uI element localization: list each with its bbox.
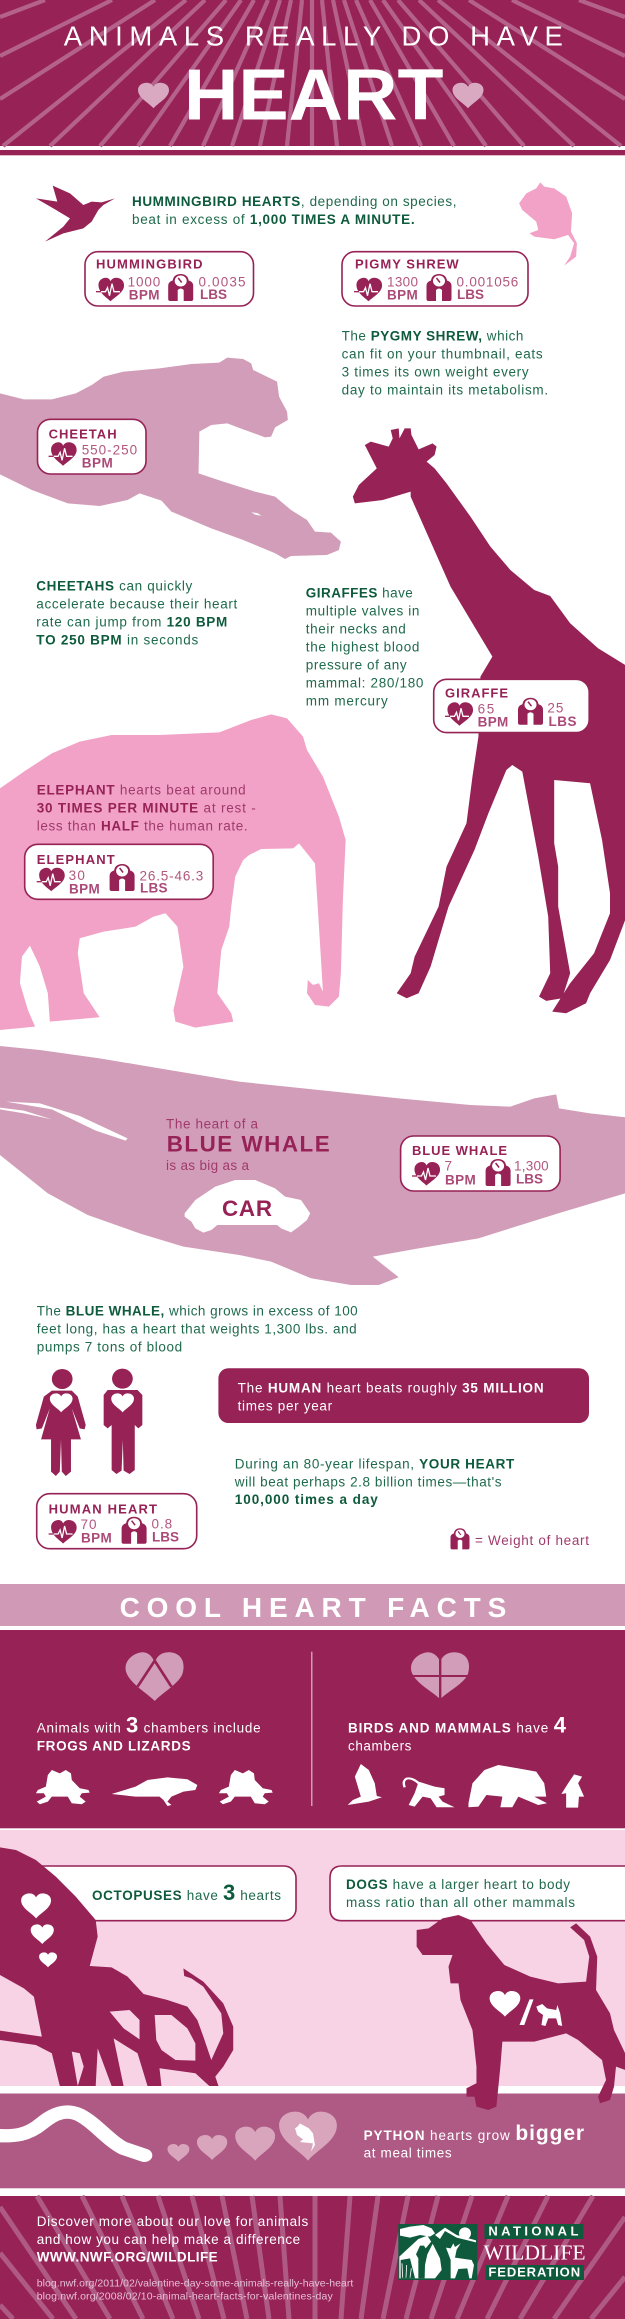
- text: blue whale paragraph: [37, 1304, 358, 1355]
- icon: left heart: [138, 83, 169, 108]
- python band: [0, 2094, 625, 2188]
- heading band: cool heart facts: [0, 1584, 625, 1626]
- stat box: human heart: [37, 1494, 197, 1549]
- text: source links: blog.nwf.org/2011/02/valentine-day-some-animals-really-have-heart: [37, 2278, 353, 2290]
- dog silhouette: [417, 1915, 625, 2110]
- icon: hummingbird silhouette: [36, 186, 115, 242]
- stat box: cheetah: BPM: [82, 456, 113, 471]
- icon: three chamber heart: [126, 1652, 184, 1701]
- text: hummingbird hearts: beat in excess of 1,000 TIMES A MINUTE.: [132, 212, 415, 227]
- stat box: pigmy shrew: [342, 252, 528, 306]
- icons: frogs and lizard: [36, 1770, 273, 1806]
- text: giraffes: their necks and: [306, 622, 406, 637]
- panel: chambers: [0, 1630, 625, 1828]
- text: hummingbird hearts: [132, 194, 456, 227]
- stat box: hummingbird: 0.0035: [198, 275, 246, 290]
- stat box: giraffe: LBS: [548, 714, 576, 729]
- text: discover more: and how you can help make a difference: [37, 2232, 300, 2247]
- stat box: giraffe: BPM: [478, 715, 508, 730]
- stat box: hummingbird: BPM: [129, 288, 160, 303]
- header banner: [0, 0, 625, 155]
- stat box: human heart: 0.8: [152, 1516, 172, 1531]
- text: pygmy shrew: can fit on your thumbnail, eats: [342, 346, 543, 361]
- stat box: giraffe: 25: [547, 701, 563, 716]
- text: pygmy shrew: day to maintain its metabolism.: [342, 382, 548, 397]
- title line: animals really do have: ANIMALS REALLY DO HAVE: [64, 21, 563, 52]
- text: lifespan: 100,000 times a day: [235, 1492, 378, 1507]
- stat box: pigmy shrew: PIGMY SHREW: [355, 257, 459, 272]
- text: lifespan: will beat perhaps 2.8 billion times—that's: [234, 1474, 502, 1489]
- legend: weight of heart: [450, 1528, 589, 1549]
- text: discover more: Discover more about our love for animals: [37, 2214, 308, 2229]
- elephant silhouette: [0, 714, 346, 1030]
- octopus silhouette: [0, 1847, 233, 2086]
- text: four chambers: BIRDS AND MAMMALS have 4: [348, 1713, 567, 1738]
- stat box: pigmy shrew: LBS: [457, 287, 484, 302]
- logo: national wildlife federation: NATIONAL: [488, 2224, 578, 2239]
- text: giraffes: pressure of any: [306, 658, 407, 673]
- text: the heart of a blue whale: BLUE WHALE: [167, 1132, 330, 1157]
- icon: pygmy shrew silhouette: [519, 182, 577, 266]
- stat box: elephant: 30: [69, 868, 85, 883]
- stat box: human heart: HUMAN HEART: [49, 1501, 157, 1516]
- text: cheetahs: TO 250 BPM in seconds: [36, 633, 199, 648]
- text: python: [364, 2122, 584, 2161]
- text: pygmy shrew: The PYGMY SHREW, which: [342, 328, 523, 343]
- text: cheetahs: [36, 579, 238, 648]
- icon: human figures: [36, 1369, 142, 1476]
- text: elephant: ELEPHANT hearts beat around: [37, 782, 246, 797]
- text: python: PYTHON hearts grow bigger: [364, 2122, 584, 2145]
- icon: car: CAR: [222, 1196, 272, 1221]
- text: elephant: less than HALF the human rate.: [37, 818, 248, 833]
- callout: dogs: [330, 1866, 625, 1921]
- stat box: blue whale: [401, 1136, 560, 1191]
- stat box: blue whale: LBS: [516, 1172, 543, 1187]
- heading band: cool heart facts: COOL HEART FACTS: [120, 1592, 506, 1623]
- stat box: human heart: LBS: [152, 1529, 179, 1544]
- callout: dogs: mass ratio than all other mammals: [346, 1895, 575, 1910]
- text: source links: [37, 2278, 353, 2303]
- text: lifespan: During an 80-year lifespan, YOUR HEART: [235, 1456, 515, 1471]
- text: three chambers: Animals with 3 chambers include: [37, 1713, 261, 1738]
- callout: human heart beats: The HUMAN heart beats roughly 35 MILLION: [238, 1381, 544, 1396]
- text: four chambers: chambers: [348, 1738, 412, 1753]
- title word: heart: HEART: [184, 54, 444, 135]
- callout: octopuses: [30, 1866, 296, 1921]
- stat box: elephant: LBS: [140, 881, 168, 896]
- callout: human heart beats: [218, 1368, 589, 1423]
- stat box: pigmy shrew: 0.001056: [456, 275, 518, 290]
- stat box: giraffe: GIRAFFE: [445, 685, 508, 700]
- text: the heart of a blue whale: [166, 1116, 330, 1173]
- icon: four chamber heart: [409, 1652, 471, 1700]
- text: pygmy shrew: 3 times its own weight every: [342, 364, 529, 379]
- stat box: human heart: 70: [80, 1517, 96, 1532]
- stat box: elephant: [25, 844, 213, 899]
- text: giraffes: mm mercury: [306, 694, 388, 709]
- text: cheetahs: CHEETAHS can quickly: [36, 579, 193, 594]
- panel: octopus and dog background: [0, 1830, 625, 2086]
- icon: right heart: [452, 83, 484, 108]
- text: discover more: WWW.NWF.ORG/WILDLIFE: [37, 2250, 218, 2265]
- stat box: blue whale: 7: [444, 1159, 452, 1174]
- stat box: blue whale: BLUE WHALE: [412, 1143, 507, 1158]
- callout: human heart beats: times per year: [238, 1399, 333, 1414]
- text: elephant: [37, 782, 256, 833]
- icon: car: [185, 1180, 310, 1233]
- stat box: hummingbird: LBS: [200, 287, 227, 302]
- icon: octopus hearts: [21, 1893, 57, 1967]
- text: cheetahs: accelerate because their heart: [36, 597, 238, 612]
- icons: bird monkey bear penguin: [348, 1764, 584, 1808]
- stat box: human heart: BPM: [81, 1530, 112, 1545]
- stat box: blue whale: BPM: [445, 1172, 476, 1187]
- stat box: pigmy shrew: 1300: [387, 275, 418, 290]
- giraffe silhouette: [353, 428, 625, 1013]
- stat box: hummingbird: 1000: [128, 275, 160, 290]
- text: blue whale paragraph: The BLUE WHALE, which grows in excess of 100: [37, 1304, 358, 1319]
- stat box: hummingbird: [85, 252, 254, 306]
- text: lifespan: [234, 1456, 515, 1507]
- text: cheetahs: rate can jump from 120 BPM: [36, 615, 227, 630]
- logo: national wildlife federation: WILDLIFE: [484, 2240, 586, 2264]
- icon: woman: [36, 1369, 86, 1476]
- text: discover more: [37, 2214, 308, 2265]
- text: python: at meal times: [364, 2146, 452, 2161]
- text: blue whale paragraph: feet long, has a heart that weights 1,300 lbs. and: [37, 1322, 357, 1337]
- text: source links: blog.nwf.org/2008/02/10-animal-heart-facts-for-valentines-day: [37, 2291, 333, 2303]
- stat box: blue whale: 1,300: [514, 1159, 549, 1174]
- text: giraffes: mammal: 280/180: [306, 676, 423, 691]
- text: the heart of a blue whale: is as big as a: [166, 1158, 249, 1173]
- stat box: giraffe: 65: [478, 701, 494, 716]
- stat box: pigmy shrew: BPM: [387, 288, 418, 303]
- stat box: elephant: ELEPHANT: [37, 852, 115, 867]
- stat box: hummingbird: HUMMINGBIRD: [96, 257, 202, 272]
- logo: national wildlife federation: FEDERATION: [488, 2265, 580, 2280]
- text: blue whale paragraph: pumps 7 tons of blood: [37, 1340, 182, 1355]
- icon: man: [104, 1369, 142, 1474]
- stat box: elephant: BPM: [69, 881, 100, 896]
- text: three chambers: [37, 1713, 261, 1753]
- icon: growing hearts: [167, 2112, 337, 2162]
- text: giraffes: the highest blood: [306, 640, 419, 655]
- text: hummingbird hearts: HUMMINGBIRD HEARTS, depending on species,: [132, 194, 456, 209]
- footer panel: [0, 2196, 625, 2319]
- callout: octopuses: OCTOPUSES have 3 hearts: [92, 1880, 281, 1905]
- text: elephant: 30 TIMES PER MINUTE at rest -: [37, 800, 256, 815]
- text: three chambers: FROGS AND LIZARDS: [37, 1738, 191, 1753]
- text: pygmy shrew: [342, 328, 548, 397]
- stat box: cheetah: [38, 419, 146, 474]
- cheetah silhouette: [0, 358, 341, 559]
- text: giraffes: GIRAFFES have: [306, 586, 413, 601]
- text: the heart of a blue whale: The heart of a: [166, 1116, 258, 1131]
- text: giraffes: [306, 586, 423, 709]
- stat box: cheetah: CHEETAH: [49, 427, 117, 442]
- stat box: elephant: 26.5-46.3: [140, 868, 203, 883]
- stat box: cheetah: 550-250: [82, 442, 137, 457]
- text: four chambers: [348, 1713, 567, 1753]
- text: giraffes: multiple valves in: [306, 604, 419, 619]
- blue whale silhouette: [0, 1046, 625, 1285]
- snake silhouette: [0, 2112, 144, 2155]
- legend: weight of heart: = Weight of heart: [475, 1533, 589, 1548]
- callout: dogs: DOGS have a larger heart to body: [346, 1877, 570, 1892]
- stat box: giraffe: [434, 679, 589, 733]
- icon: heart to body mass ratio: [490, 1991, 562, 2026]
- logo: national wildlife federation: [398, 2224, 586, 2280]
